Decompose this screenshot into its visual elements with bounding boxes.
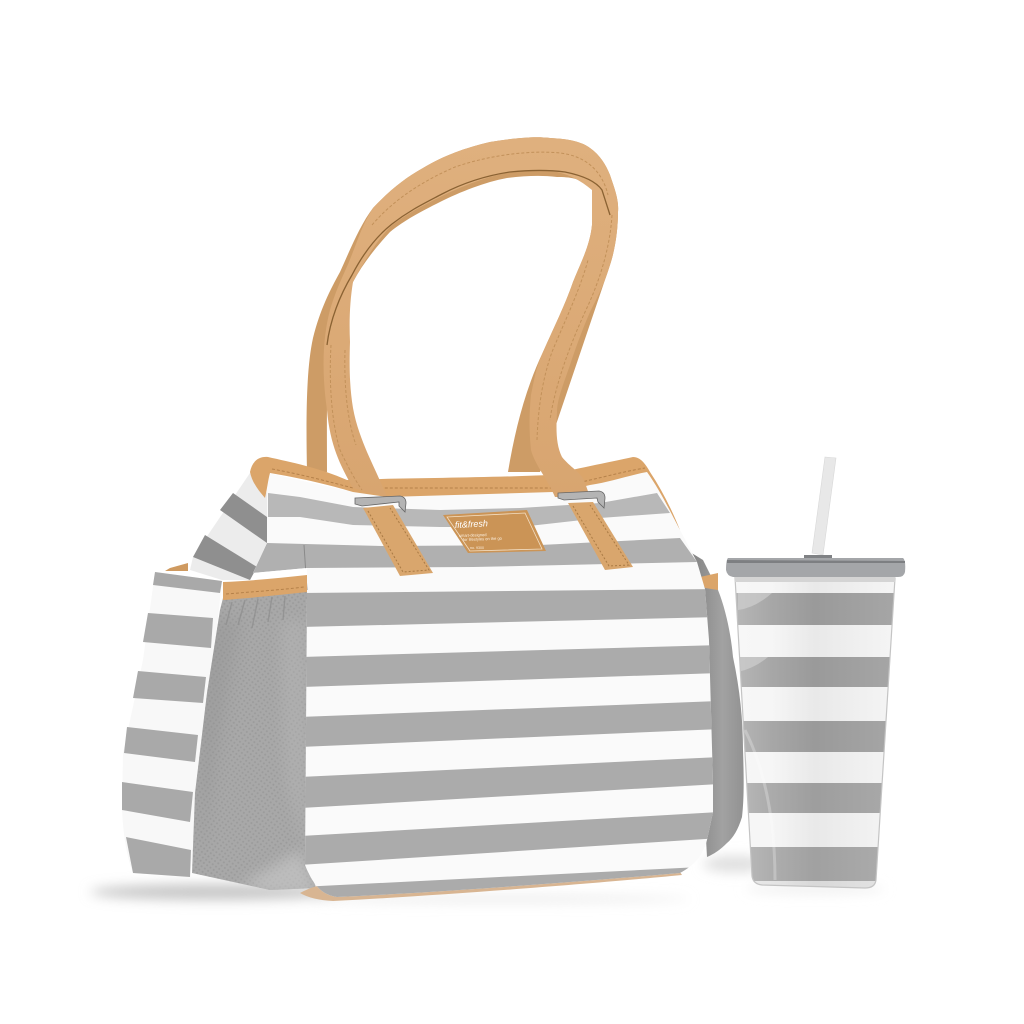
right metal buckle <box>558 491 605 508</box>
left pocket tan trim <box>223 575 307 600</box>
handle inner shadow line <box>327 170 610 345</box>
top tan rim <box>250 457 680 530</box>
tumbler cup <box>730 575 900 895</box>
brand name: fit&fresh <box>455 518 488 530</box>
brand label patch <box>443 510 546 553</box>
handle stitching <box>330 152 612 490</box>
product illustration <box>91 137 906 906</box>
right pocket trim <box>700 573 718 590</box>
left strap tab <box>363 505 433 576</box>
label tagline: smart-designed <box>459 532 487 538</box>
label footer: no. 9300 <box>470 546 484 550</box>
back strands of the handle <box>307 137 618 472</box>
bag bottom tan edge <box>300 872 682 901</box>
right side gusset <box>690 552 744 857</box>
upper left gusset stripes <box>190 473 267 580</box>
ground shadow <box>90 856 885 902</box>
front panel with stripes <box>253 493 713 897</box>
front handle <box>324 137 618 497</box>
tumbler straw <box>812 457 836 555</box>
mesh pocket <box>192 590 320 895</box>
tumbler lid <box>726 555 905 582</box>
right strap tab <box>568 502 633 570</box>
left metal buckle <box>355 496 406 512</box>
side pocket with stripes <box>122 563 222 877</box>
label tagline second line: for lifestyles on the go <box>463 536 503 542</box>
